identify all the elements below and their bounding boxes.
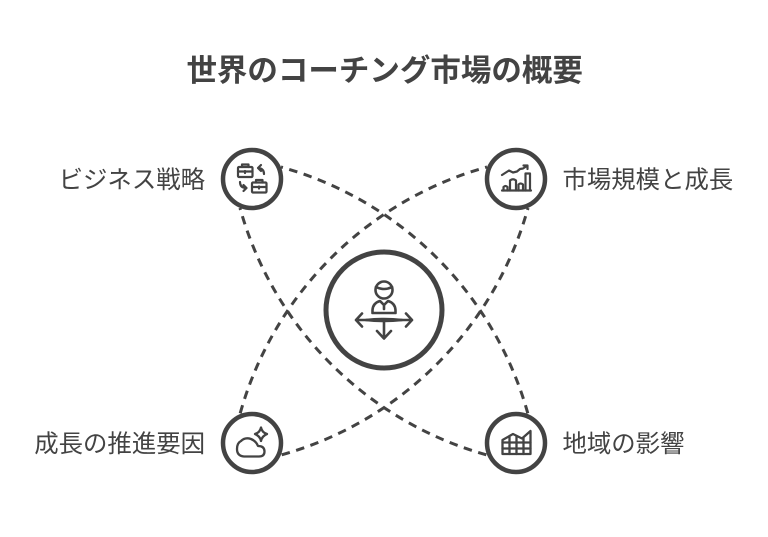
node: regional impact xyxy=(487,414,545,472)
label: growth drivers: 成長の推進要因 xyxy=(34,431,205,458)
node: growth drivers xyxy=(223,414,281,472)
icon: bar chart with rising line xyxy=(502,166,531,190)
title: 世界のコーチング市場の概要 xyxy=(186,54,583,88)
central circle with person and arrows icon xyxy=(326,252,442,368)
icon: cloud with sparkle xyxy=(237,428,267,456)
icon: grid with skyline xyxy=(502,431,530,454)
node: business strategy xyxy=(223,150,281,208)
label: business strategy: ビジネス戦略 xyxy=(59,167,206,194)
label: regional impact: 地域の影響 xyxy=(562,431,684,458)
dashed connector arcs xyxy=(240,167,528,455)
node: market size and growth xyxy=(487,150,545,208)
label: market size and growth: 市場規模と成長 xyxy=(562,167,733,194)
icon: briefcases with swap arrows xyxy=(238,164,266,192)
